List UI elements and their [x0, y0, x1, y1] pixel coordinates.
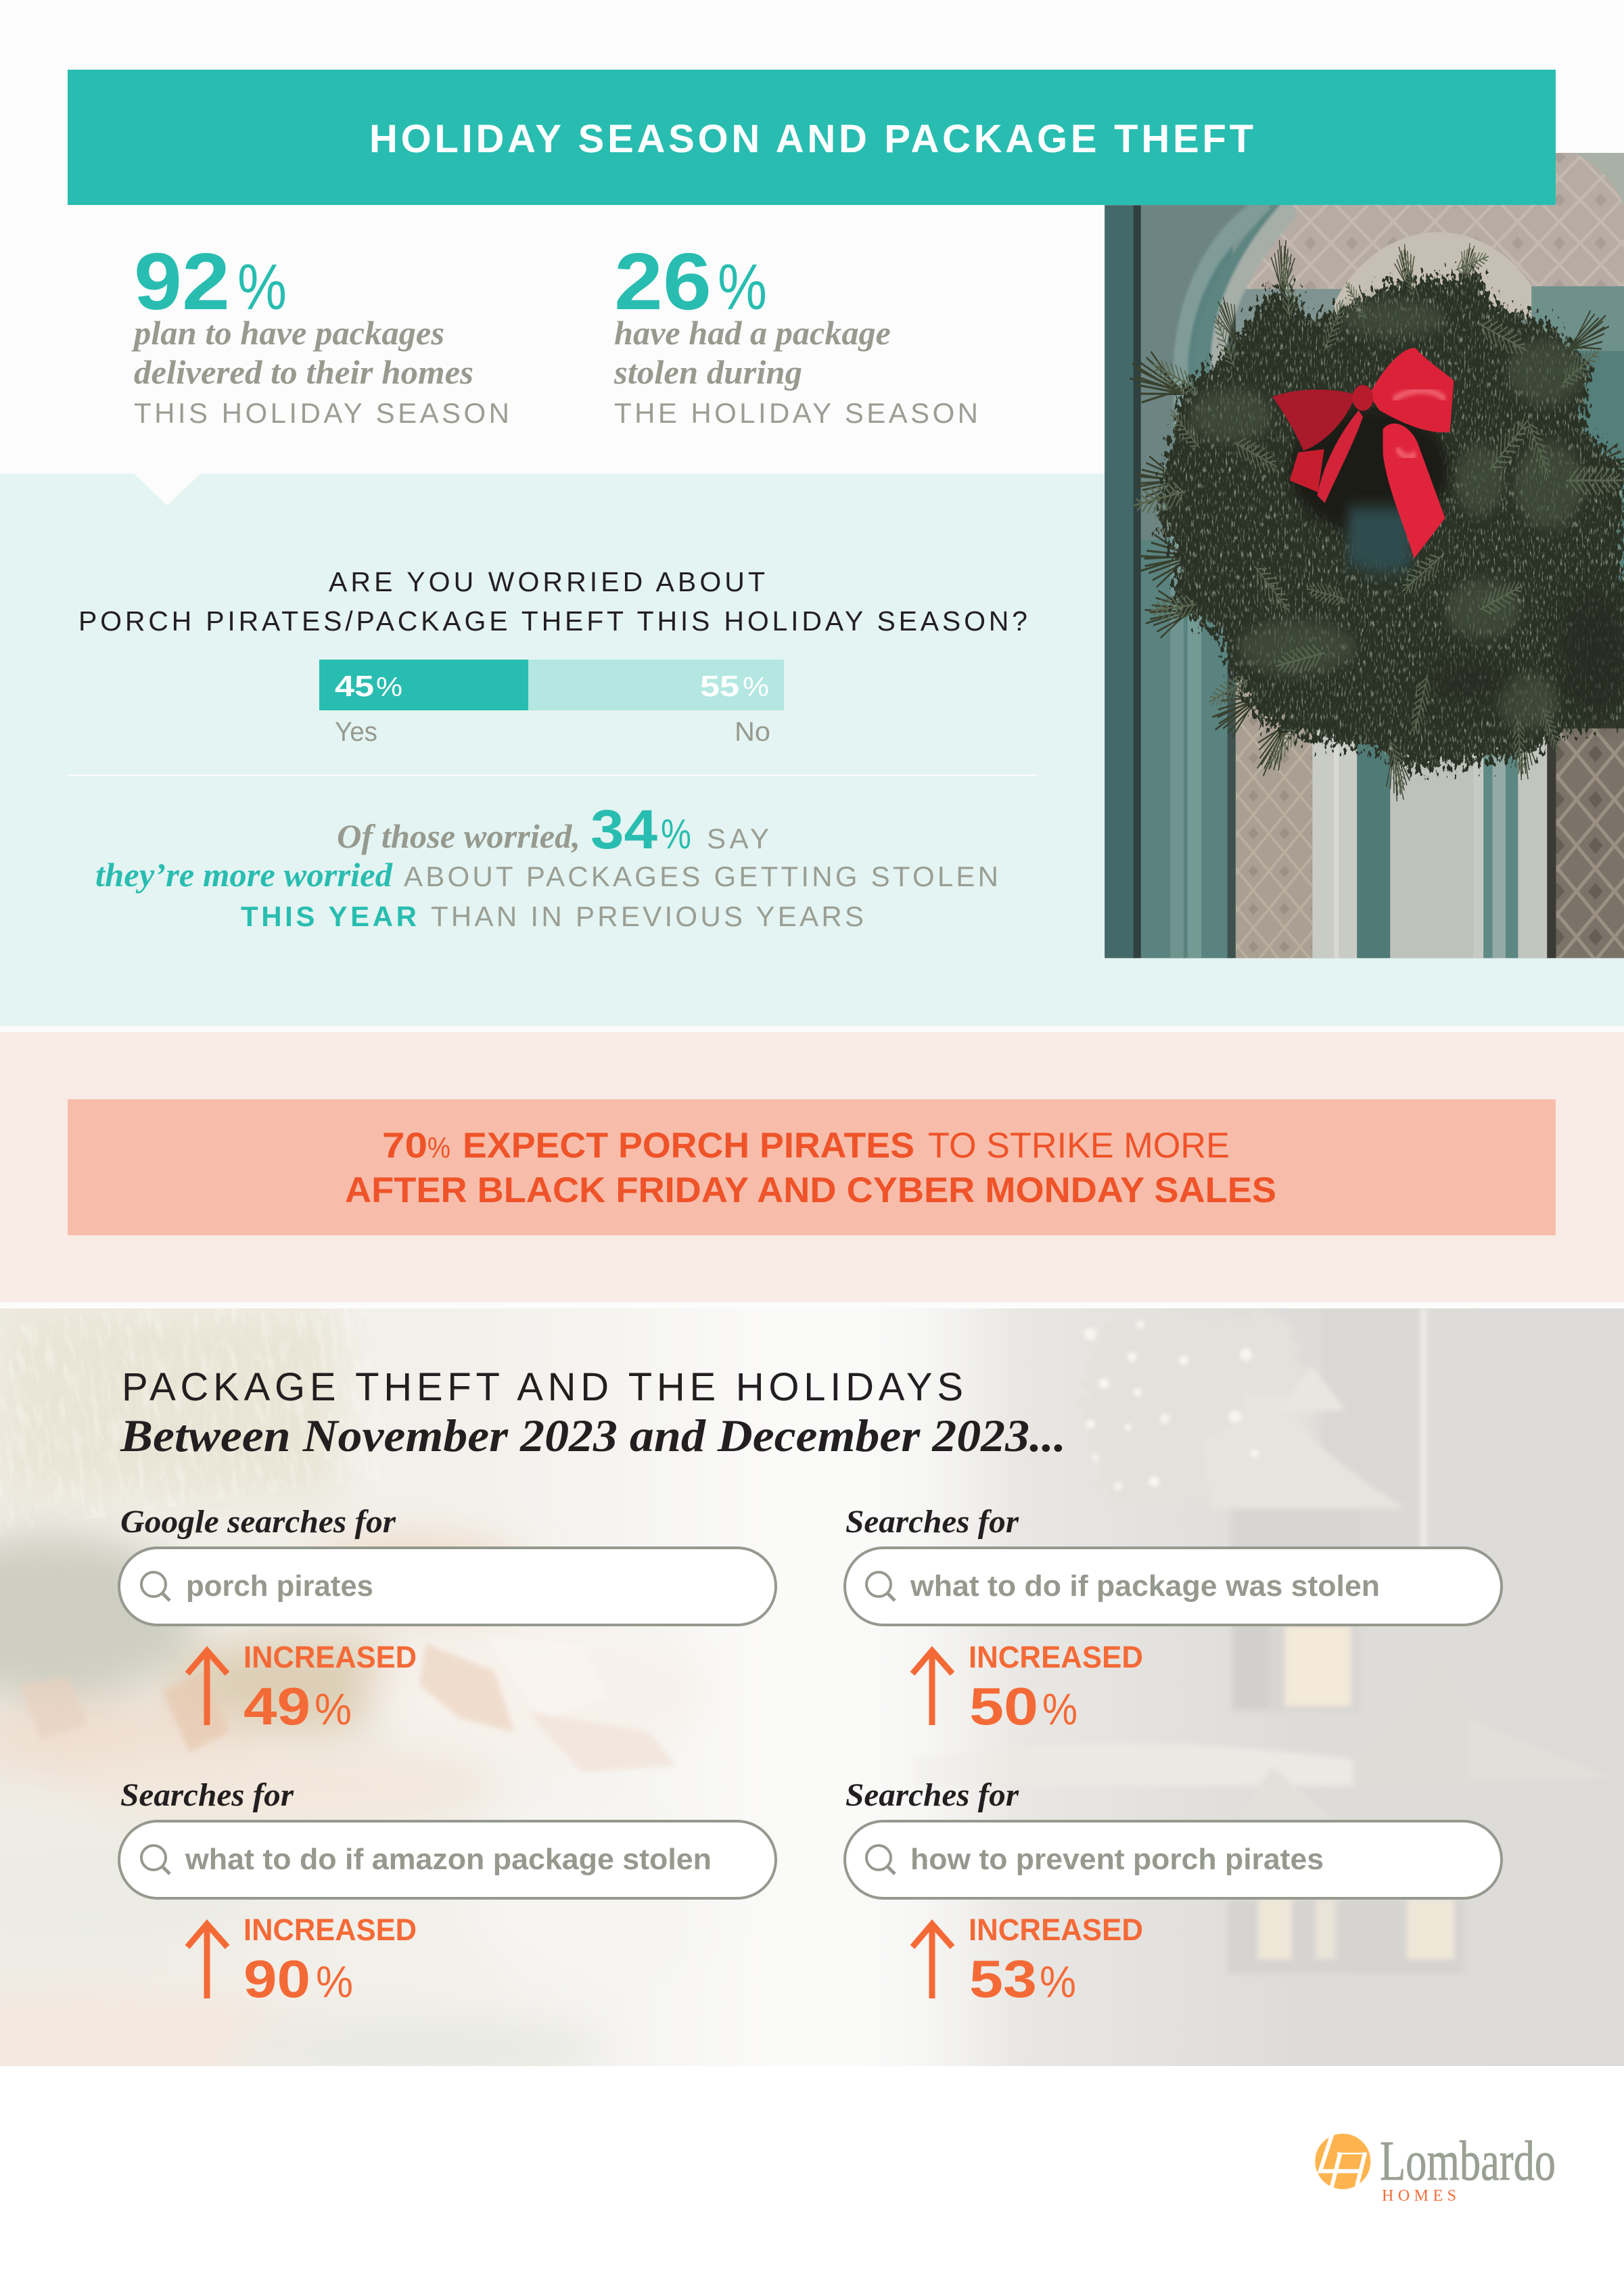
callout: 34 percent more worried: Of those worried,: [337, 817, 580, 855]
arrow up: [187, 1651, 227, 1725]
centre fade: [676, 1308, 1015, 2066]
stat: 92 percent: delivered to their homes: [134, 353, 473, 391]
stat: 92 percent: plan to have packages: [131, 314, 444, 352]
lower door panels: [1236, 674, 1312, 958]
icon: magnifier: [866, 1572, 895, 1601]
search card: what to do if amazon package stolen: Searches for: [120, 1777, 294, 1813]
search card: what to do if package was stolen: 50: [969, 1676, 1038, 1736]
callout: 34 percent more worried: THAN IN PREVIOUS YEARS: [431, 900, 864, 932]
icon: magnifier: [866, 1846, 895, 1874]
stat: 26 percent: %: [718, 251, 767, 323]
tree lights: [1084, 1321, 1259, 1490]
left autumn blobs: [0, 1308, 744, 2084]
inner arch: [1335, 232, 1531, 319]
survey question heading: ARE YOU WORRIED ABOUT: [329, 566, 765, 597]
search card: what to do if package was stolen: [845, 1504, 1502, 1736]
icon: red bow: [1272, 348, 1454, 559]
left column and panel: [1105, 206, 1136, 958]
wreath lighter clusters: [1189, 300, 1583, 729]
callout banner: 70: [382, 1126, 427, 1166]
panel: light teal worry survey: [0, 474, 1624, 1026]
heading: package theft and the holidays: Between November 2023 and December 2023...: [120, 1410, 1066, 1461]
search card: what to do if amazon package stolen: %: [316, 1956, 353, 2007]
search card: porch pirates: porch pirates: [186, 1569, 373, 1603]
stat: 92 percent: %: [237, 251, 287, 323]
stat: 26 percent: 26: [614, 237, 712, 327]
search card: what to do if package was stolen: Searches for: [845, 1504, 1019, 1540]
title banner: [68, 70, 1556, 205]
logo: Lombardo Homes: Lombardo: [1380, 2130, 1556, 2193]
stat: 26 percent: [613, 237, 978, 429]
bar chart: yes 45 no 55: [319, 660, 784, 747]
autumn leaves: [20, 1637, 676, 1772]
stat: 92 percent: [131, 237, 509, 429]
wreath sprigs: [1132, 248, 1623, 798]
bar chart: yes 45 no 55: 55: [700, 670, 739, 703]
search card: how to prevent porch pirates: INCREASED: [969, 1912, 1143, 1947]
arrow up: [912, 1651, 952, 1725]
callout: 34 percent more worried: THIS YEAR: [241, 900, 417, 932]
search card: how to prevent porch pirates: 53: [969, 1949, 1037, 2009]
callout banner: TO STRIKE MORE: [928, 1126, 1230, 1166]
callout: 34 percent more worried: 34: [590, 799, 657, 861]
callout: 34 percent more worried: they’re more worried: [95, 856, 393, 894]
callout banner: [68, 1099, 1556, 1235]
photo: faded autumn and lantern background: [0, 1275, 1624, 2084]
arrow up: [187, 1924, 227, 1998]
stat: 26 percent: have had a package: [614, 314, 891, 352]
arrow up: [912, 1924, 952, 1998]
bar chart: yes 45 no 55: 45: [335, 670, 374, 703]
search card: what to do if amazon package stolen: INCREASED: [243, 1912, 417, 1947]
search card: how to prevent porch pirates: %: [1040, 1956, 1076, 2007]
search card: what to do if amazon package stolen: [119, 1777, 776, 2009]
photo: door with wreath: [1105, 152, 1624, 958]
callout banner: %: [427, 1131, 450, 1164]
search card: how to prevent porch pirates: Searches for: [845, 1777, 1019, 1813]
right window and lanterns: [913, 1308, 1617, 1974]
survey question heading: PORCH PIRATES/PACKAGE THEFT THIS HOLIDAY SEASON?: [78, 605, 1027, 637]
search card: what to do if amazon package stolen: what to do if amazon package stolen: [185, 1843, 712, 1876]
stat: 26 percent: stolen during: [613, 353, 802, 391]
callout: 34 percent more worried: ABOUT PACKAGES GETTING STOLEN: [404, 861, 998, 892]
pointer notch: [134, 474, 201, 505]
bar chart: yes 45 no 55: Yes: [335, 717, 377, 747]
wallpaper top: [1245, 153, 1624, 290]
search card: how to prevent porch pirates: [845, 1777, 1502, 2009]
panel: pink 70 percent: [0, 1032, 1624, 1302]
search card: what to do if amazon package stolen: 90: [243, 1949, 310, 2009]
search card: what to do if package was stolen: %: [1042, 1684, 1077, 1734]
bar chart: yes 45 no 55: %: [743, 672, 769, 702]
callout: 34 percent more worried: SAY: [707, 823, 769, 854]
callout banner: EXPECT PORCH PIRATES: [463, 1126, 914, 1166]
search card: what to do if package was stolen: what to do if package was stolen: [910, 1569, 1380, 1603]
stat: 92 percent: THIS HOLIDAY SEASON: [134, 397, 509, 429]
bar chart: yes 45 no 55: No: [735, 717, 770, 747]
bar chart: yes 45 no 55: %: [376, 672, 402, 702]
callout banner: AFTER BLACK FRIDAY AND CYBER MONDAY SALES: [345, 1170, 1276, 1210]
logo: Lombardo Homes: HOMES: [1382, 2187, 1456, 2205]
callout: 34 percent more worried: [95, 799, 998, 932]
wreath centre shadow: [1290, 405, 1449, 534]
stat: 26 percent: THE HOLIDAY SEASON: [614, 397, 978, 429]
logo: Lombardo Homes: [1315, 2130, 1556, 2205]
stat: 92 percent: 92: [134, 237, 230, 327]
arch molding: [1181, 206, 1293, 545]
search card: porch pirates: INCREASED: [243, 1640, 417, 1674]
heading: package theft and the holidays: PACKAGE THEFT AND THE HOLIDAYS: [122, 1365, 963, 1409]
hay straw texture: [0, 1275, 392, 1533]
survey question heading: [78, 566, 1027, 637]
search card: porch pirates: %: [315, 1684, 352, 1734]
title banner: HOLIDAY SEASON AND PACKAGE THEFT: [369, 117, 1253, 161]
search card: porch pirates: Google searches for: [120, 1504, 396, 1540]
search card: how to prevent porch pirates: how to prevent porch pirates: [910, 1843, 1324, 1876]
wreath body: [1158, 273, 1624, 771]
right teal band: [1531, 286, 1624, 351]
search card: porch pirates: [119, 1504, 776, 1736]
icon: magnifier: [141, 1846, 170, 1874]
icon: magnifier: [141, 1572, 170, 1601]
callout: 34 percent more worried: %: [661, 811, 691, 858]
heading: package theft and the holidays: [120, 1365, 1066, 1461]
wreath shadow patches: [1424, 588, 1624, 718]
wreath outer spikes: [1127, 240, 1624, 804]
search card: what to do if package was stolen: INCREASED: [969, 1640, 1143, 1674]
search card: porch pirates: 49: [243, 1676, 310, 1736]
